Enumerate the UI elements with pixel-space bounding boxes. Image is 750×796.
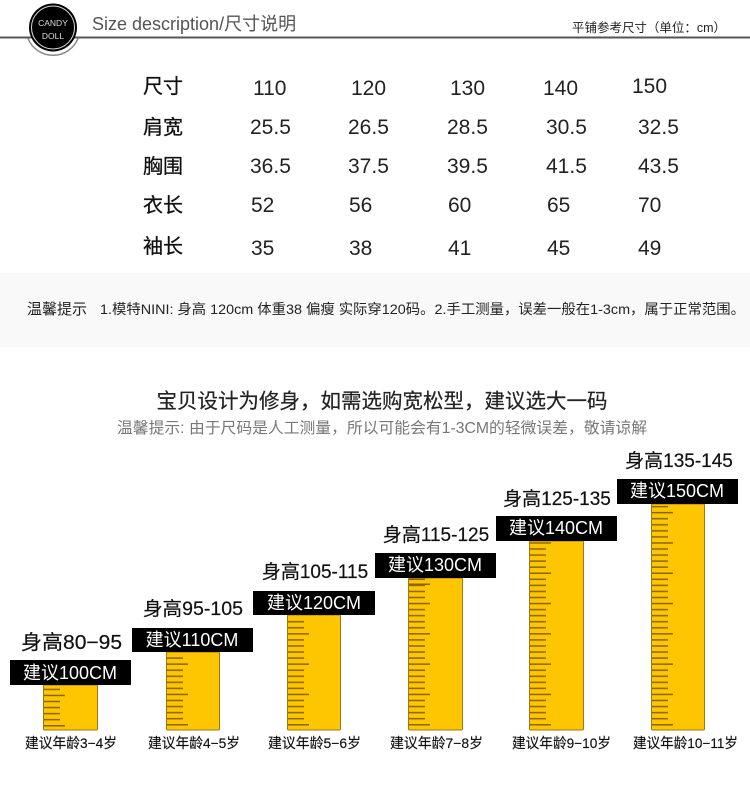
ruler: 140CM [496, 488, 617, 751]
table row: chest: 37.5 [348, 155, 389, 178]
icon: Candy Doll logo: DOLL [42, 31, 64, 41]
ruler: 130CM: 建议130CM [388, 555, 482, 575]
table row: sleeve [143, 235, 661, 260]
text: measurement tip: 温馨提示: 由于尺码是人工测量，所以可能会有1-3CM的轻微误差，敬请谅解 [117, 419, 647, 437]
ruler: 140CM: 建议140CM [509, 518, 603, 538]
table row: chest: 36.5 [250, 155, 291, 178]
table row: chest: 41.5 [546, 155, 587, 178]
text: measurement note: 平铺参考尺寸（单位：cm） [572, 20, 726, 35]
table row: chest: 43.5 [638, 155, 679, 178]
ruler: 110CM [132, 598, 253, 751]
ruler: 150CM: 建议150CM [630, 481, 724, 501]
heading: recommendation: 宝贝设计为修身，如需选购宽松型，建议选大一码 [156, 390, 608, 413]
table row: sleeve: 41 [448, 237, 471, 260]
panel: tips band: 温馨提示 [27, 301, 87, 318]
ruler: 150CM [617, 450, 738, 751]
ruler: 100CM: 建议年龄3−4岁 [25, 735, 117, 751]
ruler: 140CM: 身高125-135 [503, 488, 611, 510]
ruler: 150CM: 建议年龄10−11岁 [633, 735, 738, 751]
table row: size: 110 [253, 77, 286, 100]
table row: chest [143, 155, 679, 178]
ruler: 120CM: 身高105-115 [262, 561, 368, 583]
heading: size description: Size description/尺寸说明 [92, 14, 296, 34]
table row: size: 150 [632, 75, 667, 98]
ruler: 110CM: 建议110CM [146, 630, 238, 650]
ruler: 130CM: 身高115-125 [383, 524, 489, 546]
icon: Candy Doll logo [28, 4, 78, 55]
ruler: 140CM: 建议年龄9−10岁 [512, 735, 611, 751]
table row: sleeve: 袖长 [143, 235, 183, 258]
table row: length: 60 [448, 194, 471, 217]
ruler: 120CM [253, 561, 375, 751]
table row: sleeve: 45 [547, 237, 570, 260]
table row: size: 120 [351, 77, 386, 100]
table row: length: 衣长 [143, 194, 183, 217]
ruler: 110CM: 身高95-105 [143, 598, 243, 620]
table row: sleeve: 49 [638, 237, 661, 260]
table row: length: 56 [349, 194, 372, 217]
table row: shoulder [143, 116, 679, 139]
icon: Candy Doll logo: CANDY [38, 18, 68, 28]
panel: header [0, 4, 750, 55]
table row: chest: 39.5 [447, 155, 488, 178]
ruler: 130CM [375, 524, 496, 751]
ruler: 120CM: 建议年龄5−6岁 [268, 735, 361, 751]
table row: length: 70 [638, 194, 661, 217]
table row: chest: 胸围 [143, 155, 183, 178]
table row: sleeve: 38 [349, 237, 372, 260]
table row: shoulder: 肩宽 [143, 116, 183, 139]
table row: shoulder: 30.5 [546, 116, 587, 139]
table row: shoulder: 28.5 [447, 116, 488, 139]
table row: sleeve: 35 [251, 237, 274, 260]
table row: length: 52 [251, 194, 274, 217]
table row: shoulder: 26.5 [348, 116, 389, 139]
table row: size: 尺寸 [143, 75, 183, 98]
ruler: 150CM: 身高135-145 [625, 450, 733, 472]
panel: tips band: 1.模特NINI: 身高 120cm 体重38 偏瘦 实际穿120码。2.手工测量，误差一般在1-3cm，属于正常范围。 [100, 301, 745, 317]
chart: height rulers [10, 450, 738, 751]
ruler: 100CM: 身高80−95 [21, 631, 122, 654]
table row: size: 140 [543, 77, 578, 100]
table row: length: 65 [547, 194, 570, 217]
ruler: 110CM: 建议年龄4−5岁 [148, 735, 240, 751]
table row: size [143, 75, 667, 100]
table row: size: 130 [450, 77, 485, 100]
size table [143, 75, 679, 260]
ruler: 100CM: 建议100CM [23, 663, 117, 683]
panel: tips band [0, 273, 750, 347]
table row: shoulder: 25.5 [250, 116, 291, 139]
table row: length [143, 194, 661, 217]
ruler: 130CM: 建议年龄7−8岁 [390, 735, 483, 751]
ruler: 120CM: 建议120CM [267, 593, 361, 613]
table row: shoulder: 32.5 [638, 116, 679, 139]
ruler: 100CM [10, 631, 131, 751]
